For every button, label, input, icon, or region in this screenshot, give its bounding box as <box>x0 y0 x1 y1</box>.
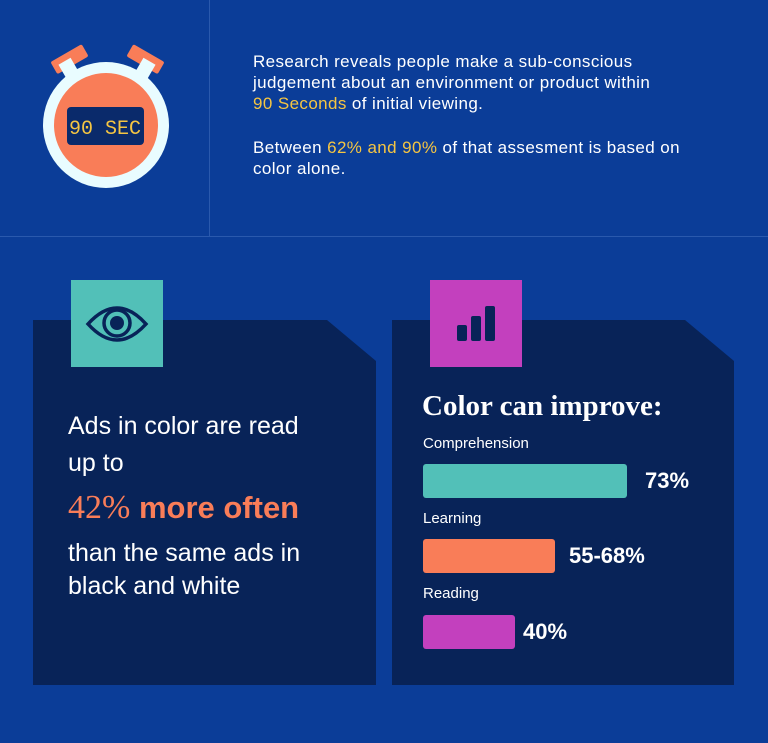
icon: stopwatch <box>43 44 169 188</box>
bar chart: 40% <box>523 619 567 644</box>
bar chart: 73% <box>645 468 689 493</box>
icon: stopwatch: 90 SEC <box>69 118 141 141</box>
text block: research intro: Between 62% and 90% of that assesment is based on <box>253 138 680 157</box>
text block: ads statistic: black and white <box>68 572 240 600</box>
heading: Color can improve: <box>422 390 663 422</box>
icon: bar chart <box>430 280 522 367</box>
text block: ads statistic: up to <box>68 449 124 477</box>
text block: research intro: color alone. <box>253 159 346 178</box>
icon: eye <box>71 280 163 367</box>
text block: research intro: judgement about an environment or product within <box>253 73 650 92</box>
panel: color can improve <box>392 320 734 685</box>
panel: ads in color <box>33 320 376 685</box>
text block: ads statistic: 42% more often <box>68 489 299 526</box>
bar chart: Comprehension <box>423 435 529 452</box>
text block: research intro: 90 Seconds of initial viewing. <box>253 94 483 113</box>
bar chart: Reading <box>423 585 479 602</box>
text block: ads statistic: than the same ads in <box>68 539 300 567</box>
text block: ads statistic: Ads in color are read <box>68 412 299 440</box>
text block: research intro <box>252 52 680 178</box>
text block: research intro: Research reveals people make a sub-conscious <box>253 52 633 71</box>
bar chart: Learning <box>423 510 481 527</box>
text block: ads statistic <box>68 416 299 594</box>
bar chart <box>423 437 688 649</box>
bar chart: 55-68% <box>569 543 645 568</box>
